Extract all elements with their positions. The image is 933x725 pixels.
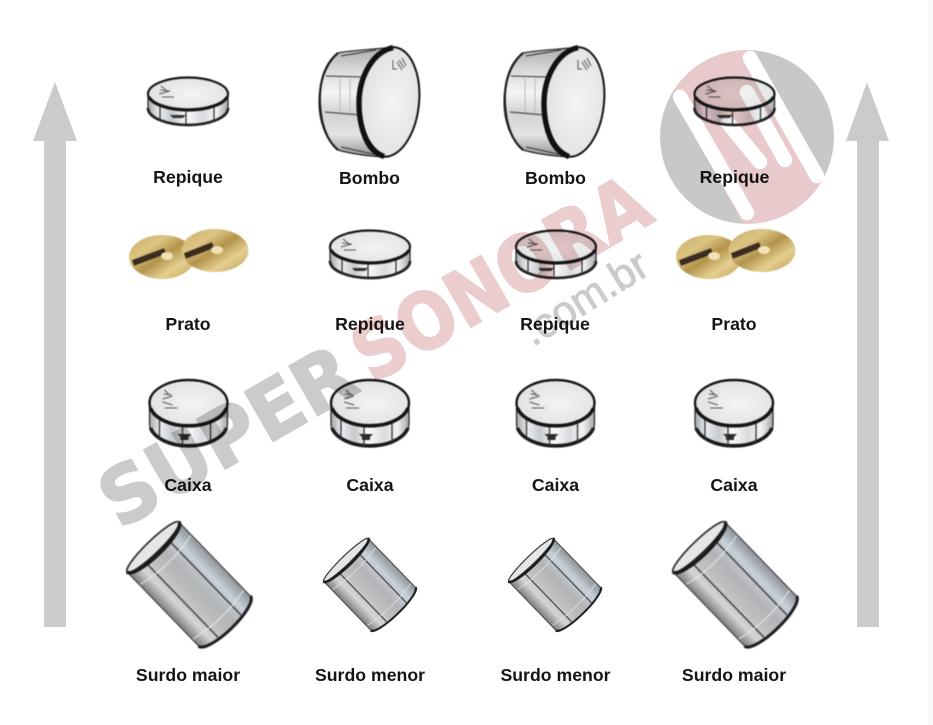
labels row 3: Caixa (710, 475, 758, 495)
labels row 4 (136, 665, 786, 685)
drum: surdo maior column 4 (669, 517, 803, 653)
watermark wordmark (84, 159, 666, 546)
labels row 3: Caixa (164, 475, 212, 495)
labels row 4: Surdo menor (315, 665, 425, 685)
labels row 3: Caixa (532, 475, 579, 495)
drum: repique row 2 column 3 (516, 230, 596, 278)
labels row 1: Repique (153, 167, 223, 187)
labels row 2 (165, 314, 757, 334)
labels row 2: Repique (335, 314, 405, 334)
drum: caixa column 4 (695, 380, 773, 447)
drum: surdo maior column 1 (123, 517, 257, 653)
right upward arrow (846, 82, 889, 627)
labels row 3: Caixa (346, 475, 394, 495)
watermark wordmark: SUPER (84, 329, 371, 546)
watermark wordmark: SONORA (337, 159, 666, 400)
watermark logo: circle with drumstick stripes (660, 50, 834, 224)
right edge strip (928, 0, 933, 725)
drum: bombo column 2 (319, 44, 425, 160)
watermark domain: .com.br (513, 241, 657, 355)
labels row 4: Surdo maior (136, 665, 240, 685)
labels row 1: Bombo (525, 168, 586, 188)
labels row 2: Repique (520, 314, 590, 334)
labels row 4: Surdo maior (682, 665, 786, 685)
drum: repique row 1 column 4 (694, 78, 774, 125)
labels row 4: Surdo menor (500, 665, 611, 685)
drum: surdo menor column 3 (506, 535, 605, 635)
cymbals: prato column 4 (676, 229, 796, 279)
cymbals: prato column 1 (129, 229, 248, 279)
drum: caixa column 1 (150, 380, 228, 447)
drum: surdo menor column 2 (321, 535, 420, 635)
left upward arrow (33, 82, 77, 627)
drum: caixa column 3 (516, 380, 594, 447)
labels row 2: Prato (711, 314, 757, 334)
labels row 1 (153, 167, 770, 188)
drum: caixa column 2 (331, 380, 409, 447)
labels row 3 (164, 475, 758, 495)
labels row 1: Bombo (339, 168, 400, 188)
drum: repique row 2 column 2 (330, 230, 410, 278)
labels row 2: Prato (165, 314, 211, 334)
labels row 1: Repique (700, 167, 770, 187)
drum: repique row 1 column 1 (148, 78, 228, 125)
drum: bombo column 3 (504, 44, 610, 160)
